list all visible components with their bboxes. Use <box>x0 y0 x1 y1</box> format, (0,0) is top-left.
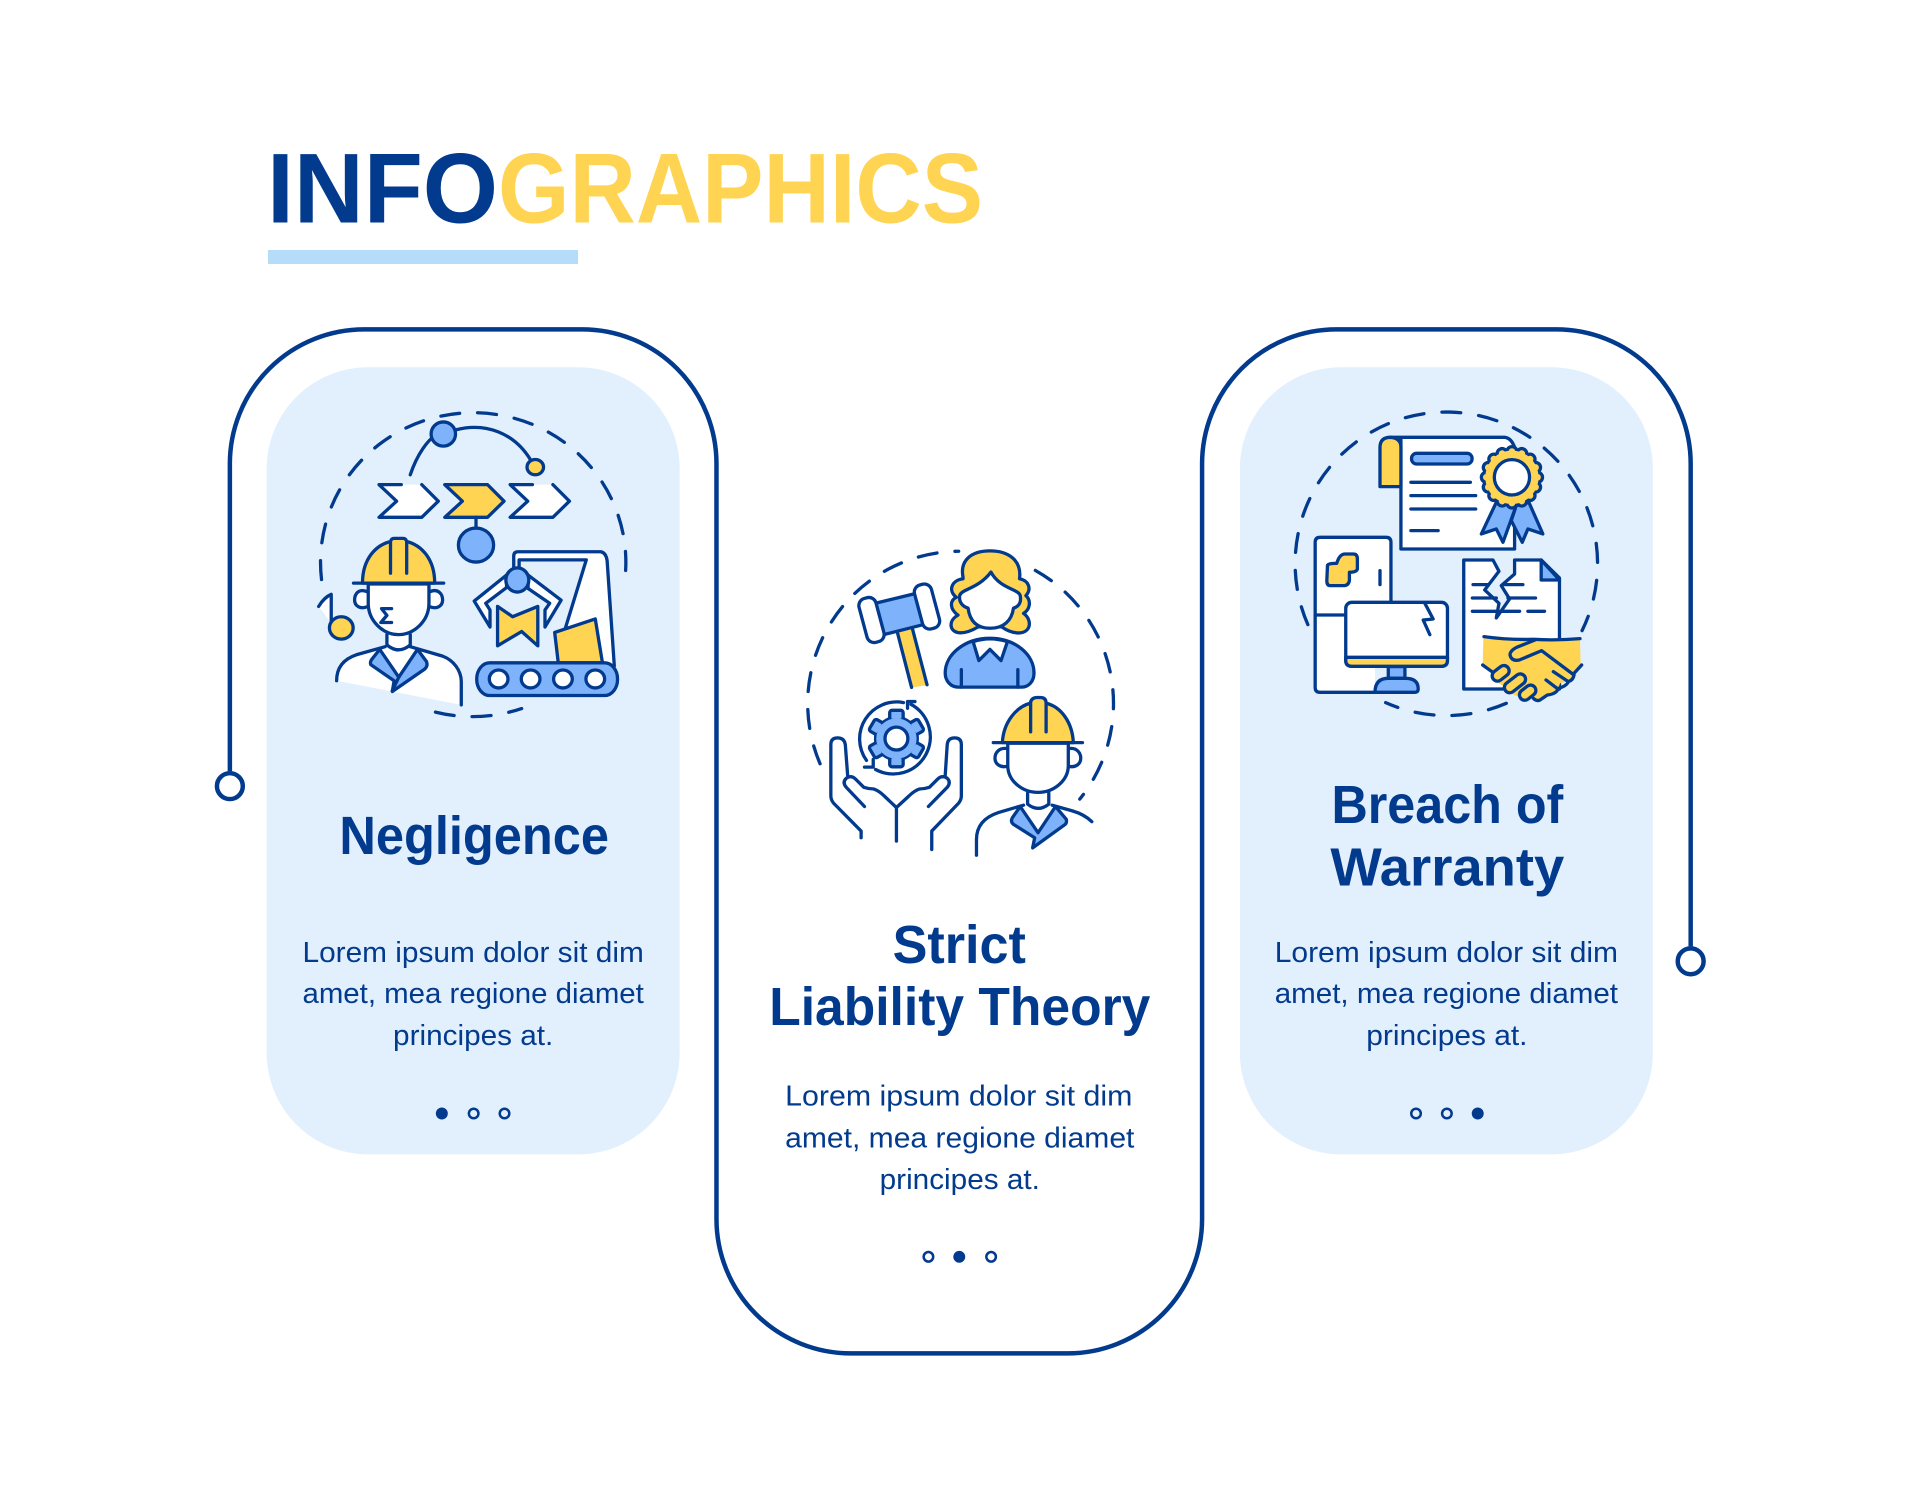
panel: negligence background <box>267 367 680 1154</box>
right outline end ring <box>1678 948 1704 974</box>
heading: strict liability theory <box>769 915 1150 1037</box>
text: breach of warranty body <box>1275 937 1618 1052</box>
icon: breach of warranty certificate, device and torn document <box>1295 412 1598 716</box>
pagination dots: strict liability <box>924 1251 996 1263</box>
text: breach of warranty body: Lorem ipsum dolor sit dim <box>1275 937 1618 969</box>
title underline <box>268 250 578 264</box>
icon: strict liability judge, gavel, gear and worker <box>808 551 1113 855</box>
text: negligence body: Lorem ipsum dolor sit dim <box>303 937 644 969</box>
heading: breach of warranty: Warranty <box>1330 838 1564 898</box>
text: negligence body: amet, mea regione diamet <box>303 978 644 1010</box>
text: negligence body: principes at. <box>393 1020 553 1052</box>
heading: strict liability theory: Strict <box>893 915 1026 975</box>
heading: breach of warranty <box>1330 775 1564 898</box>
text: strict liability body: Lorem ipsum dolor sit dim <box>785 1081 1132 1113</box>
text: breach of warranty body: principes at. <box>1366 1020 1527 1052</box>
title: INFO <box>267 133 498 244</box>
heading: strict liability theory: Liability Theory <box>769 977 1150 1037</box>
heading: negligence: Negligence <box>339 806 609 866</box>
icon: handshake <box>1483 637 1582 702</box>
panel: breach of warranty background <box>1240 367 1653 1154</box>
connecting outline <box>230 329 1691 1353</box>
left outline end ring <box>217 773 243 799</box>
text: negligence body <box>303 937 644 1052</box>
text: strict liability body: principes at. <box>880 1164 1040 1196</box>
icon: negligence worker, workflow and robot arm <box>319 413 626 717</box>
pagination dots: breach of warranty <box>1411 1108 1484 1119</box>
title: GRAPHICS <box>498 133 983 244</box>
title <box>267 133 983 244</box>
text: breach of warranty body: amet, mea regione diamet <box>1275 978 1618 1010</box>
infographic content <box>217 329 1704 1353</box>
pagination dots: negligence <box>436 1108 509 1119</box>
text: strict liability body: amet, mea regione diamet <box>785 1122 1135 1154</box>
text: strict liability body <box>785 1081 1135 1196</box>
heading: breach of warranty: Breach of <box>1331 775 1563 835</box>
